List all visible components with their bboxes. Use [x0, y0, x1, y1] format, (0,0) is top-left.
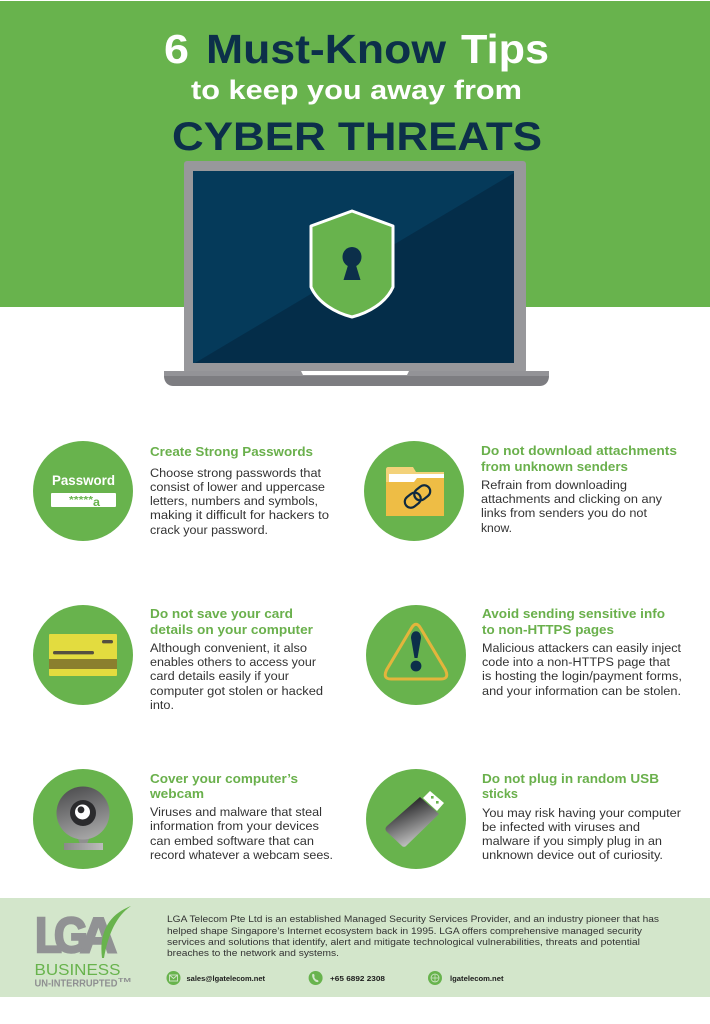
body text: unknown device out of curiosity.: [482, 848, 663, 862]
icon: password field: a: [93, 495, 100, 509]
title: Must-Know: [206, 26, 446, 72]
contact: website: [428, 971, 504, 985]
heading: Create Strong Passwords: [150, 444, 313, 459]
icon: folder with link: [364, 441, 464, 541]
body text: [482, 641, 682, 698]
contact: email: [166, 971, 265, 985]
heading: to non-HTTPS pages: [482, 622, 614, 637]
company description: helped shape Singapore’s Internet ecosystem back in 1995. LGA offers comprehensive managed security: [167, 926, 642, 937]
body text: Choose strong passwords that: [150, 466, 322, 480]
body text: consist of lower and uppercase: [150, 480, 325, 494]
LGA logo: L: [35, 909, 62, 963]
body text: Refrain from downloading: [481, 478, 627, 492]
logo tagline: TM: [118, 978, 132, 984]
title: to keep you away from: [191, 75, 522, 105]
heading: Cover your computer’s: [150, 771, 298, 786]
laptop illustration: [164, 161, 549, 386]
contact: website: lgatelecom.net: [450, 974, 504, 983]
body text: Viruses and malware that steal: [150, 805, 322, 819]
body text: card details easily if your: [150, 669, 289, 683]
heading: details on your computer: [150, 622, 313, 637]
body text: [482, 806, 681, 862]
tip: strong passwords: [33, 441, 329, 541]
title: Tips: [461, 26, 549, 72]
LGA logo: A: [80, 909, 117, 963]
title: [164, 26, 549, 159]
tip: card details: [33, 605, 323, 712]
body text: [481, 478, 663, 535]
LGA logo: [35, 909, 117, 963]
body text: record whatever a webcam sees.: [150, 848, 333, 862]
heading: [482, 771, 659, 801]
body text: be infected with viruses and: [482, 820, 640, 834]
body text: enables others to access your: [150, 655, 316, 669]
heading: Do not plug in random USB: [482, 771, 659, 786]
title: 6: [164, 26, 189, 72]
contact: email: sales@lgatelecom.net: [186, 974, 265, 983]
icon: password field: [33, 441, 133, 541]
body text: information from your devices: [150, 819, 319, 833]
body text: Malicious attackers can easily inject: [482, 641, 682, 655]
contact: phone: +65 6892 2308: [330, 974, 385, 983]
body text: malware if you simply plug in an: [482, 834, 662, 848]
heading: Avoid sending sensitive info: [482, 606, 665, 621]
body text: and your information can be stolen.: [482, 684, 681, 698]
contact: phone: [309, 971, 385, 985]
heading: Do not save your card: [150, 606, 293, 621]
heading: [482, 606, 665, 637]
heading: from unknown senders: [481, 459, 628, 474]
logo swoosh: [101, 906, 131, 958]
tip: webcam: [33, 769, 333, 869]
body text: crack your password.: [150, 523, 268, 537]
icon: password field: *****: [69, 495, 93, 506]
icon: password field: Password: [52, 473, 115, 488]
icon: security shield: [311, 211, 393, 317]
company description: services and solutions that identify, alert and mitigate technological vulnerabilities, threats and potential: [167, 937, 640, 948]
body text: making it difficult for hackers to: [150, 508, 329, 522]
icon: warning triangle: [366, 605, 466, 705]
heading: Do not download attachments: [481, 443, 677, 458]
company description: [167, 914, 659, 959]
body text: [150, 466, 329, 537]
body text: know.: [481, 521, 512, 535]
icon: USB stick: [366, 769, 466, 869]
tip: attachments: [364, 441, 677, 541]
LGA logo: G: [54, 909, 88, 963]
icon: webcam: [33, 769, 133, 869]
company description: breaches to the network and systems.: [167, 948, 339, 959]
footer panel: [0, 898, 710, 997]
tip: non-HTTPS pages: [366, 605, 682, 705]
icon: credit card: [33, 605, 133, 705]
body text: code into a non-HTTPS page that: [482, 655, 671, 669]
body text: can embed software that can: [150, 834, 314, 848]
heading: [150, 606, 313, 637]
body text: into.: [150, 698, 174, 712]
company description: LGA Telecom Pte Ltd is an established Managed Security Services Provider, and an industry pioneer that has: [167, 914, 659, 925]
body text: attachments and clicking on any: [481, 492, 663, 506]
logo tagline: UN-INTERRUPTED: [34, 978, 118, 990]
body text: [150, 805, 333, 862]
heading: sticks: [482, 786, 518, 801]
body text: letters, numbers and symbols,: [150, 494, 318, 508]
logo tagline: [34, 962, 132, 990]
body text: Although convenient, it also: [150, 641, 307, 655]
body text: computer got stolen or hacked: [150, 684, 323, 698]
body text: is hosting the login/payment forms,: [482, 669, 682, 683]
title: CYBER THREATS: [172, 115, 542, 159]
body text: [150, 641, 323, 712]
tip: USB sticks: [366, 769, 681, 869]
logo tagline: BUSINESS: [34, 962, 120, 979]
header band: [0, 1, 710, 307]
heading: [149, 771, 298, 801]
heading: [481, 443, 677, 474]
heading: webcam: [149, 786, 204, 801]
body text: You may risk having your computer: [482, 806, 681, 820]
body text: links from senders you do not: [481, 506, 648, 520]
